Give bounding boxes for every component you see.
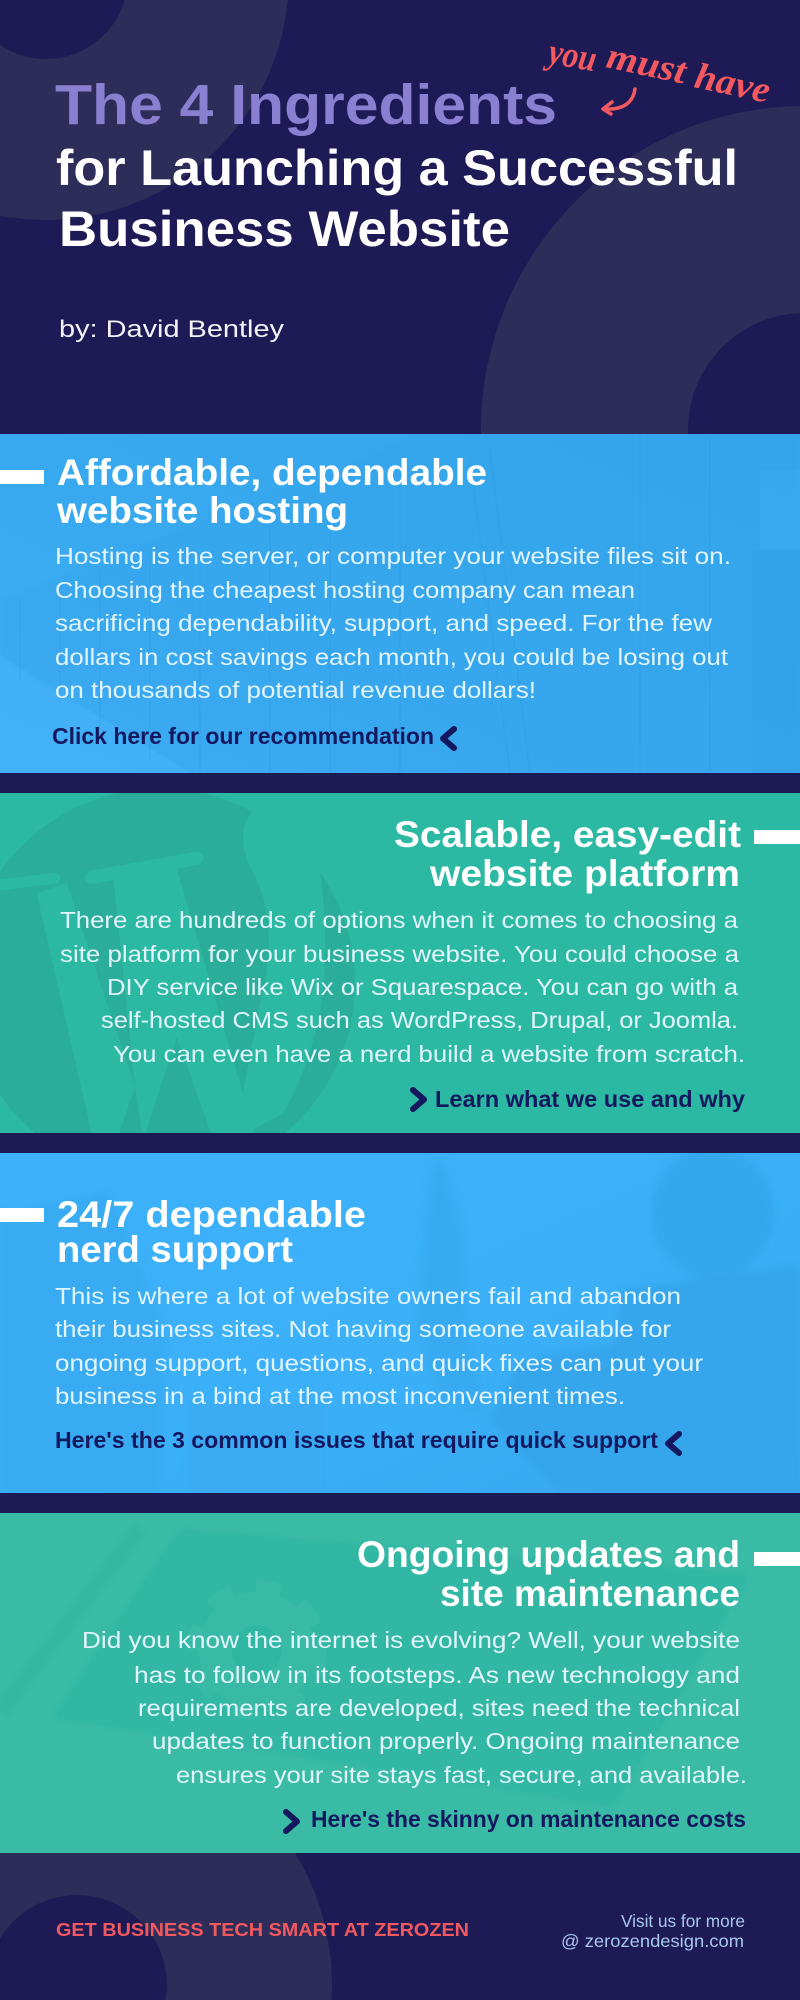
heading: Ongoing updates and xyxy=(357,1534,740,1575)
title line 1: The 4 Ingredients xyxy=(55,73,557,137)
heading xyxy=(394,814,741,894)
body text: Choosing the cheapest hosting company can mean xyxy=(55,577,635,603)
panel: maintenance xyxy=(0,1513,800,1853)
footer contact xyxy=(561,1911,745,1951)
body text: ensures your site stays fast, secure, and available. xyxy=(176,1762,747,1788)
icon: chevron left xyxy=(443,729,454,748)
body text: updates to function properly. Ongoing maintenance xyxy=(152,1728,740,1754)
heading: Affordable, dependable xyxy=(57,452,487,493)
body text: self-hosted CMS such as WordPress, Drupal, or Joomla. xyxy=(101,1007,738,1033)
icon: chevron right xyxy=(286,1812,297,1831)
body text: DIY service like Wix or Squarespace. You can go with a xyxy=(107,974,738,1000)
body text: has to follow in its footsteps. As new technology and xyxy=(134,1662,740,1688)
body text: their business sites. Not having someone available for xyxy=(55,1316,671,1342)
word: have: have xyxy=(691,56,774,112)
body text: requirements are developed, sites need the technical xyxy=(138,1695,740,1721)
heading xyxy=(57,1194,366,1270)
heading: site maintenance xyxy=(440,1573,740,1614)
title block xyxy=(55,73,738,257)
link: Learn what we use and why xyxy=(435,1086,745,1112)
body text xyxy=(55,543,731,703)
body text: site platform for your business website. You could choose a xyxy=(60,941,739,967)
panel: hosting xyxy=(0,434,800,773)
decorative ring: footer xyxy=(0,1853,332,2000)
heading: nerd support xyxy=(57,1229,293,1270)
body text: You can even have a nerd build a website from scratch. xyxy=(113,1041,745,1067)
title line 3: Business Website xyxy=(59,201,510,257)
marker bar xyxy=(0,470,44,484)
body text: dollars in cost savings each month, you could be losing out xyxy=(55,644,729,670)
heading: website hosting xyxy=(56,490,348,531)
panel: platform xyxy=(0,793,800,1133)
footer tagline: GET BUSINESS TECH SMART AT ZEROZEN xyxy=(56,1919,469,1940)
body text: on thousands of potential revenue dollars! xyxy=(55,677,536,703)
background photo: people at a desk xyxy=(496,1153,796,1442)
link: Here's the 3 common issues that require quick support xyxy=(55,1427,658,1453)
heading: 24/7 dependable xyxy=(57,1194,366,1235)
body text xyxy=(60,907,745,1067)
link: Click here for our recommendation xyxy=(52,723,434,749)
body text: This is where a lot of website owners fail and abandon xyxy=(55,1283,681,1309)
heading: website platform xyxy=(429,853,740,894)
panel: support xyxy=(0,1147,800,1493)
heading: Scalable, easy-edit xyxy=(394,814,741,855)
body text xyxy=(55,1283,703,1409)
decorative ring: top right xyxy=(481,106,800,434)
word: must: must xyxy=(603,36,692,93)
marker bar xyxy=(754,830,800,844)
background photo: server racks xyxy=(20,632,330,771)
heading xyxy=(56,452,487,531)
link: Here's the skinny on maintenance costs xyxy=(311,1806,746,1832)
marker bar xyxy=(0,1208,44,1222)
background photo: tablet with gear xyxy=(0,1528,740,1800)
background image: WordPress logo xyxy=(0,793,355,1133)
handwritten note xyxy=(542,31,774,112)
title line 2: for Launching a Successful xyxy=(56,140,738,196)
icon: chevron left xyxy=(668,1434,679,1453)
author byline: by: David Bentley xyxy=(59,316,284,343)
decorative ring: top left xyxy=(0,0,288,220)
marker bar xyxy=(754,1552,800,1566)
body text: sacrificing dependability, support, and speed. For the few xyxy=(55,610,712,636)
body text: Hosting is the server, or computer your website files sit on. xyxy=(55,543,731,569)
body text xyxy=(82,1627,747,1788)
body text: There are hundreds of options when it comes to choosing a xyxy=(60,907,738,933)
footer contact: Visit us for more xyxy=(621,1911,745,1931)
body text: business in a bind at the most inconvenient times. xyxy=(55,1383,625,1409)
arrow: handwritten pointing to title xyxy=(603,89,635,114)
body text: Did you know the internet is evolving? Well, your website xyxy=(82,1627,740,1653)
word: you: you xyxy=(542,31,600,80)
icon: chevron right xyxy=(413,1090,424,1109)
footer contact: @ zerozendesign.com xyxy=(561,1931,744,1951)
body text: ongoing support, questions, and quick fixes can put your xyxy=(55,1350,703,1376)
heading xyxy=(357,1534,740,1614)
